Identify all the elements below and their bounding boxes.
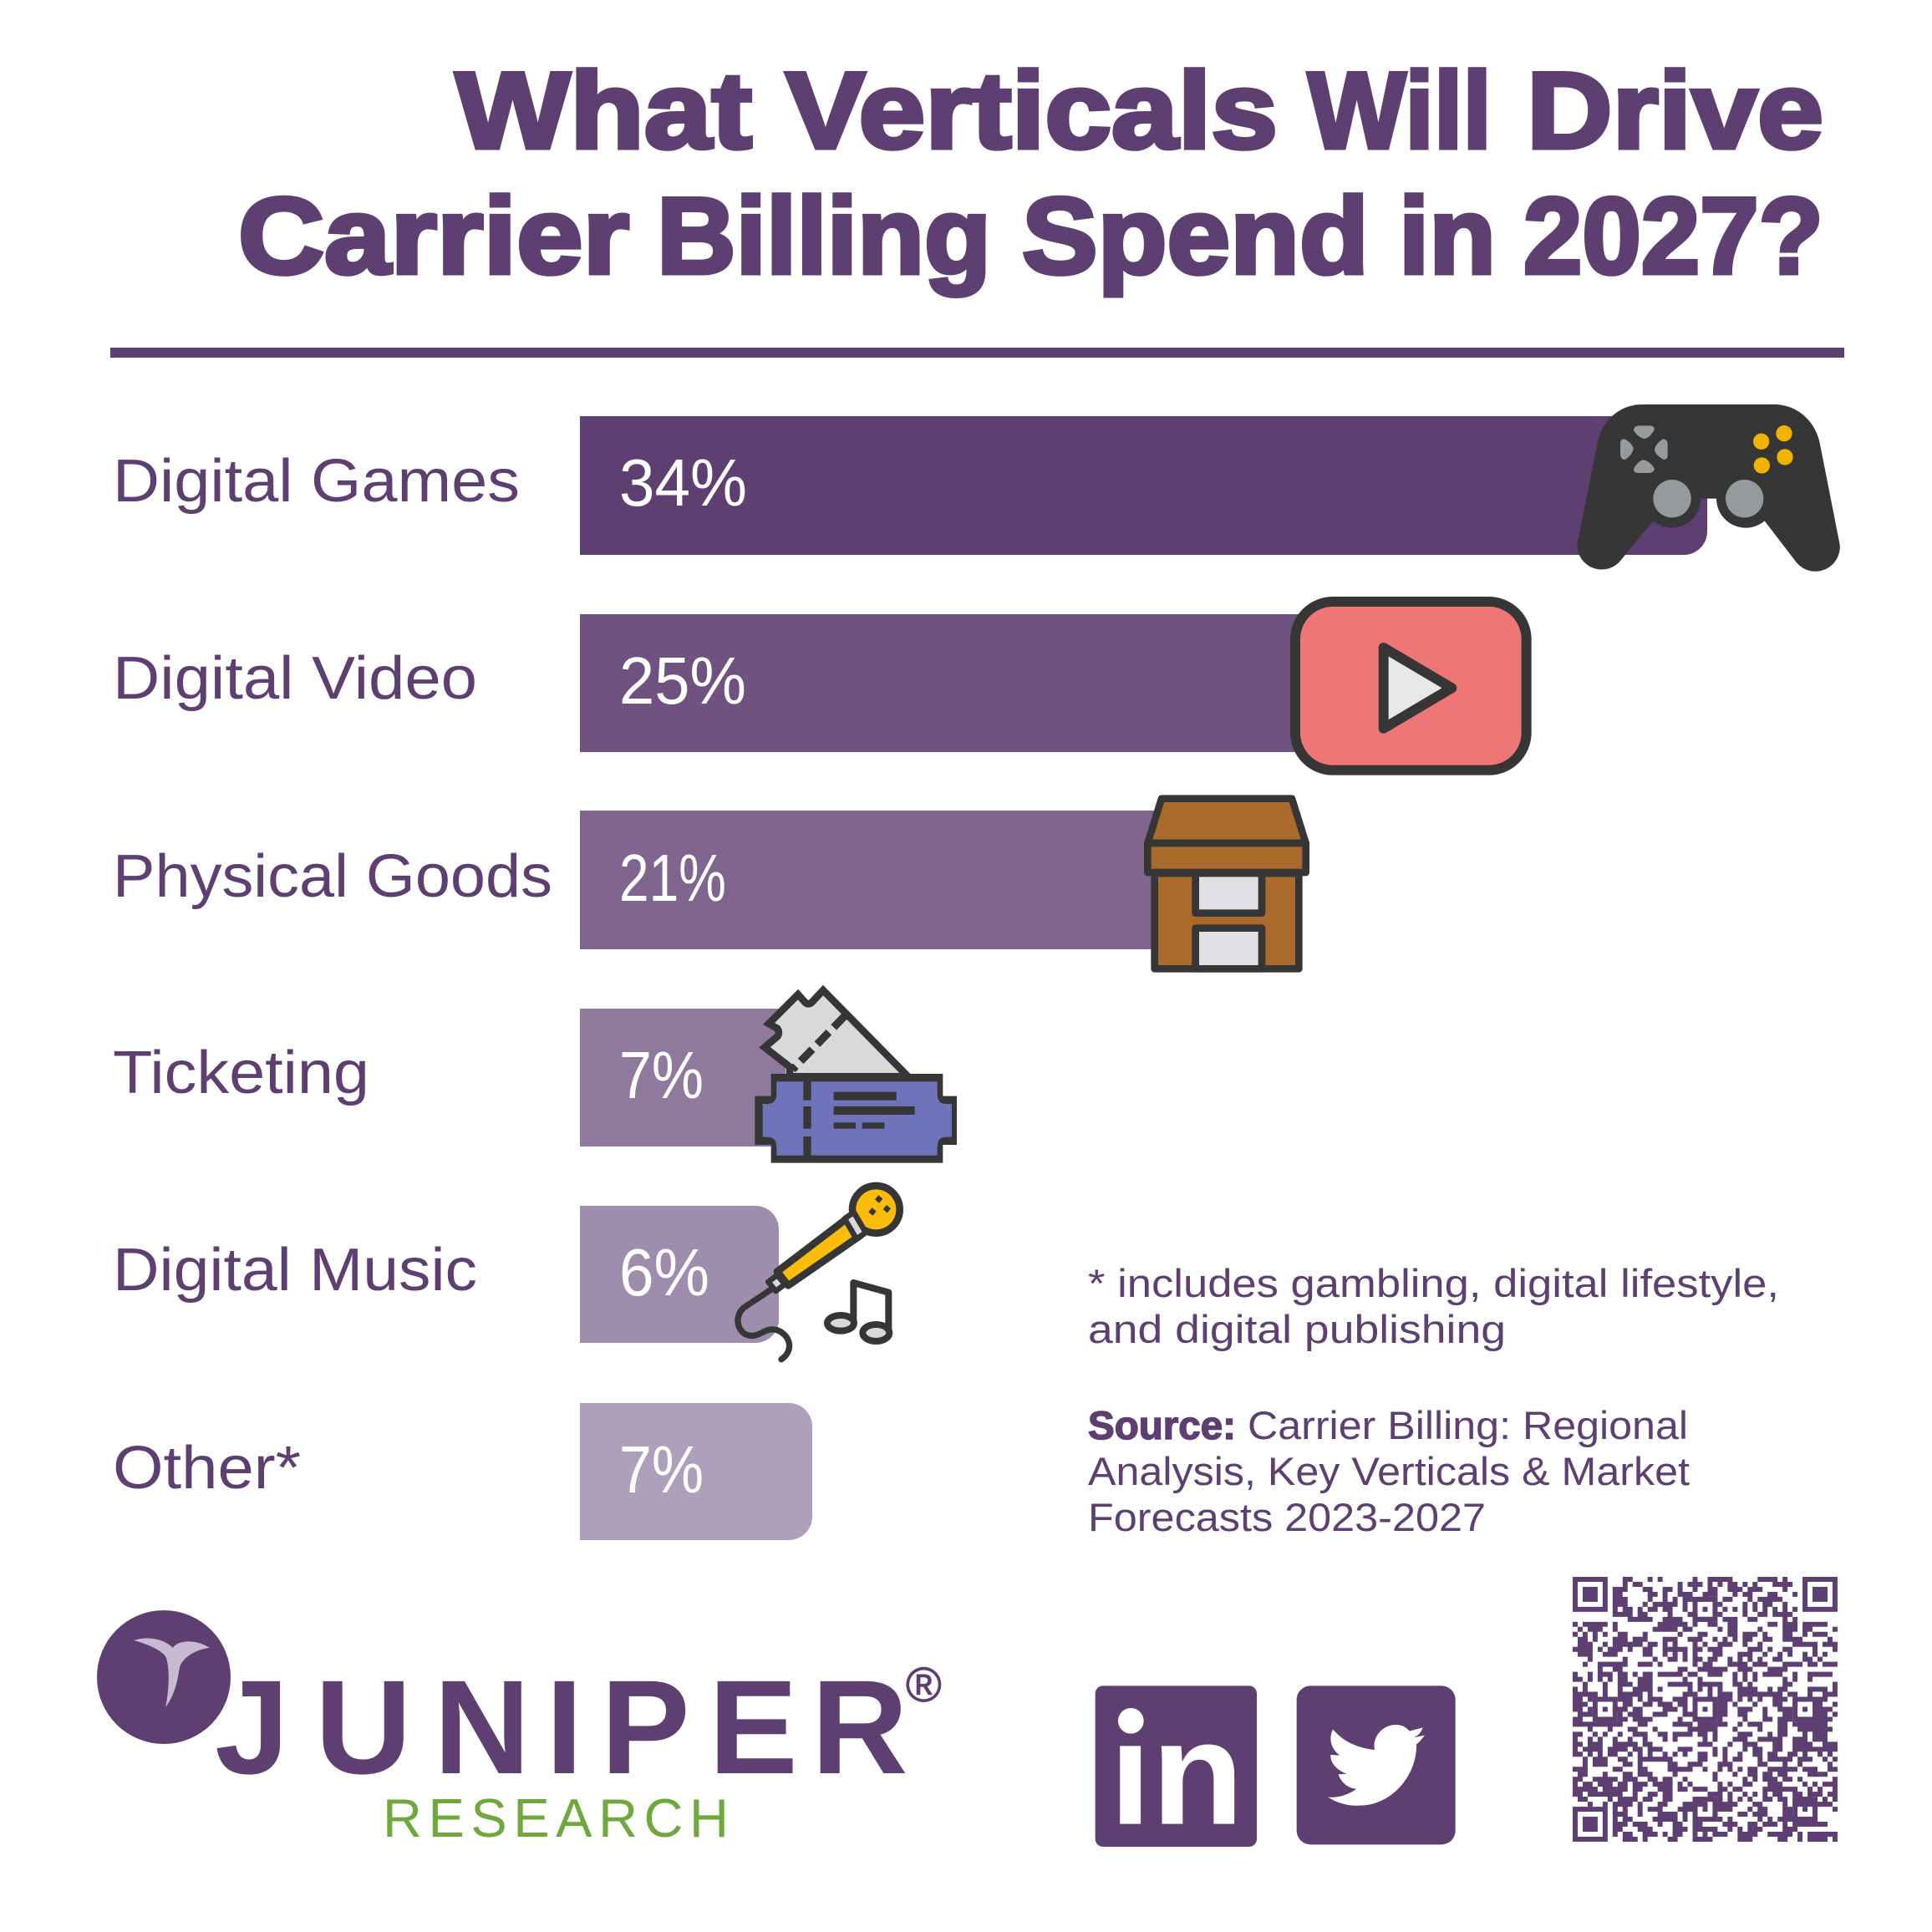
bar: Ticketing: 7% [619, 1038, 704, 1112]
icon: Twitter [1297, 1685, 1456, 1844]
wordmark: research: RESEARCH [383, 1787, 729, 1848]
bar chart [113, 416, 1707, 1540]
bar: Ticketing [113, 1009, 786, 1146]
icon: game controller [1577, 404, 1840, 572]
icon: tickets [755, 990, 957, 1163]
source: Analysis, Key Verticals & Market [1088, 1449, 1690, 1493]
bar: Digital Games: Digital Games [113, 448, 520, 515]
footnote: * includes gambling, digital lifestyle, [1088, 1261, 1779, 1305]
title: Billing [657, 175, 991, 297]
source: Source: [1088, 1403, 1236, 1447]
title: in [1399, 175, 1496, 297]
title: Spend [1022, 175, 1369, 297]
logo emblem [97, 1610, 231, 1744]
icon: LinkedIn: in [1110, 1691, 1243, 1856]
title: 2027? [1523, 175, 1823, 297]
footnote [1088, 1261, 1779, 1351]
icon: video play button [1295, 602, 1527, 770]
icon: microphone and music notes [738, 1186, 900, 1360]
bar: Physical Goods: 21% [619, 841, 726, 915]
bar: Other: Other* [113, 1435, 301, 1502]
wordmark: JUNIPER [215, 1652, 908, 1802]
source [1088, 1403, 1690, 1539]
bar: Digital Video [113, 614, 1337, 752]
title [238, 49, 1823, 297]
bar: Digital Music: Digital Music [113, 1237, 477, 1304]
source: Carrier Billing: Regional [1248, 1403, 1688, 1447]
title: Carrier [238, 175, 629, 297]
bar: Digital Games [113, 416, 1707, 555]
bar: Physical Goods [113, 811, 1170, 949]
title: What [455, 49, 752, 171]
registered mark: ® [906, 1658, 942, 1712]
bar: Digital Video: Digital Video [113, 645, 477, 712]
icon: storefront [1147, 799, 1306, 969]
bar: Ticketing: Ticketing [113, 1040, 369, 1106]
bar: Other: 7% [619, 1432, 704, 1507]
footnote: and digital publishing [1088, 1307, 1506, 1351]
bar: Physical Goods: Physical Goods [113, 843, 552, 910]
title: Verticals [786, 49, 1278, 171]
bar: Digital Music: 6% [619, 1235, 709, 1309]
logo: Juniper Research [97, 1610, 942, 1848]
bar: Digital Games: 34% [619, 445, 747, 520]
title: Will [1308, 49, 1492, 171]
title: Drive [1527, 49, 1823, 171]
QR code [1573, 1579, 1838, 1839]
bar: Digital Music [113, 1206, 779, 1343]
bar: Other [113, 1403, 812, 1540]
source: Forecasts 2023-2027 [1088, 1495, 1486, 1539]
bar: Digital Video: 25% [619, 643, 746, 718]
